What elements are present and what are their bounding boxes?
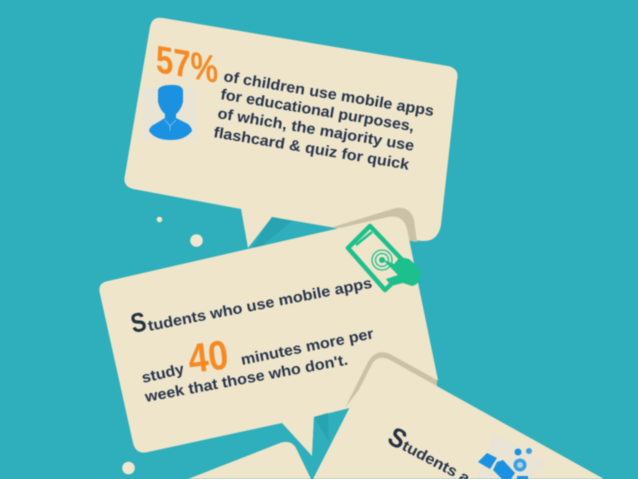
bubble 1 fold shadow xyxy=(252,217,292,248)
text: bubble 3 headline: S xyxy=(383,421,412,455)
panel: bubble 1 xyxy=(124,18,458,248)
icon: phone with tapping hand xyxy=(348,226,421,290)
panel: bubble 4 xyxy=(188,442,311,479)
text: bubble 1 copy: flashcard & quiz for quick xyxy=(212,124,411,174)
text: study 40 minutes: study xyxy=(140,361,186,387)
text: bubble 3 headline xyxy=(383,421,473,479)
text: bubble 1 copy: for educational purposes, xyxy=(219,86,415,135)
text: study 40 minutes: week that those who don't. xyxy=(143,352,349,406)
icon: person xyxy=(143,85,197,140)
bubble 2 fold shadow xyxy=(302,408,350,479)
text: bubble 2 headline: S xyxy=(128,306,149,339)
bubble 2 tan shadow xyxy=(333,208,417,242)
decorative dots xyxy=(122,217,203,474)
text: bubble 1 copy: of children use mobile apps xyxy=(222,68,435,120)
text: study 40 minutes xyxy=(140,325,375,406)
bubble 3 tan shadow xyxy=(345,352,437,408)
panel: bubble 2 xyxy=(99,216,438,479)
stat: 57%: 57% xyxy=(156,38,218,92)
text: bubble 1 copy xyxy=(212,68,435,174)
stat: 40: 40 xyxy=(185,331,231,382)
text: study 40 minutes: minutes more per xyxy=(239,325,375,369)
icon: hands and coins xyxy=(476,433,547,479)
panel: bubble 3 xyxy=(313,358,604,479)
text: bubble 1 copy: of which, the majority use xyxy=(216,105,415,155)
text: bubble 2 headline: tudents who use mobile apps xyxy=(147,275,374,335)
